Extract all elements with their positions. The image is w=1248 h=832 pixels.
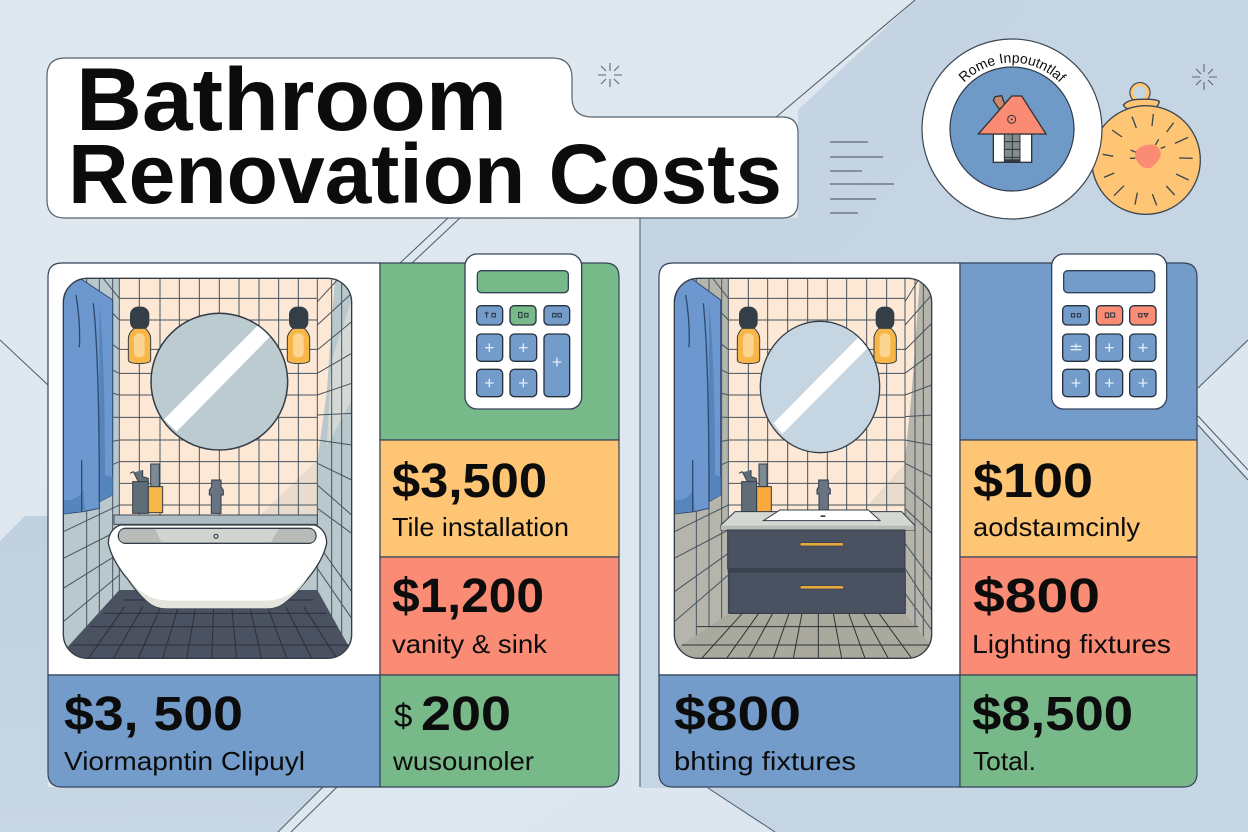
panel: right cost grid [659,229,1197,787]
cost cell: vanity and sink [380,557,619,675]
panel: left cost grid [48,229,619,787]
calculator background cell [380,263,619,440]
cost cell: orange: $100 [973,455,1093,508]
cost cell: green [380,675,619,787]
icon: green calculator [465,254,582,409]
cost cell: blue [659,675,960,787]
cost cell: lighting fixtures: $800 [973,570,1100,623]
icon: blue calculator [1052,254,1167,409]
white illustration cell [659,263,960,675]
cost cell: tile installation [380,440,619,557]
cost cell: green: $ [394,697,412,734]
cost cell: total: $8,500 [972,688,1133,741]
cost cell: blue: Viormapntin Clipuyl [64,746,305,776]
badge: home improvement [921,38,1103,220]
title [47,49,798,221]
cost cell: blue: bhting fixtures [674,746,856,776]
cost cell: lighting fixtures: Lighting fixtures [972,629,1171,659]
icon: orange pendant timer [1092,83,1200,214]
title line 1: Bathroom [76,49,507,149]
cost cell: lighting fixtures [960,557,1197,675]
cost cell: total: Total. [973,746,1036,776]
badge ring [922,39,1102,219]
cost cell: blue [48,675,380,787]
icon: sparkle near title [598,63,622,87]
calculator background cell [960,263,1197,440]
cost cell: orange: aodstaımcinly [973,512,1140,542]
white illustration cell [48,263,380,675]
cost cell: green: wusounoler [392,746,534,776]
cost cell: vanity and sink: $1,200 [392,570,544,623]
cost cell: tile installation: $3,500 [392,455,547,508]
illustration: vanity bathroom [674,278,932,659]
icon: sparkle top right [1192,64,1217,90]
badge inner disc [950,67,1074,191]
decorative lines near title [830,142,894,213]
illustration: bathtub bathroom [62,278,352,659]
cost cell: vanity and sink: vanity & sink [392,629,548,659]
title line 2: Renovation Costs [68,127,782,221]
title plate [47,58,798,218]
cost cell: green: 200 [421,688,511,741]
cost cell: orange [960,440,1197,557]
badge arc text: Rome Inpoutntlaf [958,54,1067,82]
cost cell: tile installation: Tile installation [392,512,569,542]
cost cell: blue: $3, 500 [64,688,243,741]
cost cell: blue: $800 [674,688,801,741]
cost cell: total [960,675,1197,787]
icon: house [978,96,1046,162]
